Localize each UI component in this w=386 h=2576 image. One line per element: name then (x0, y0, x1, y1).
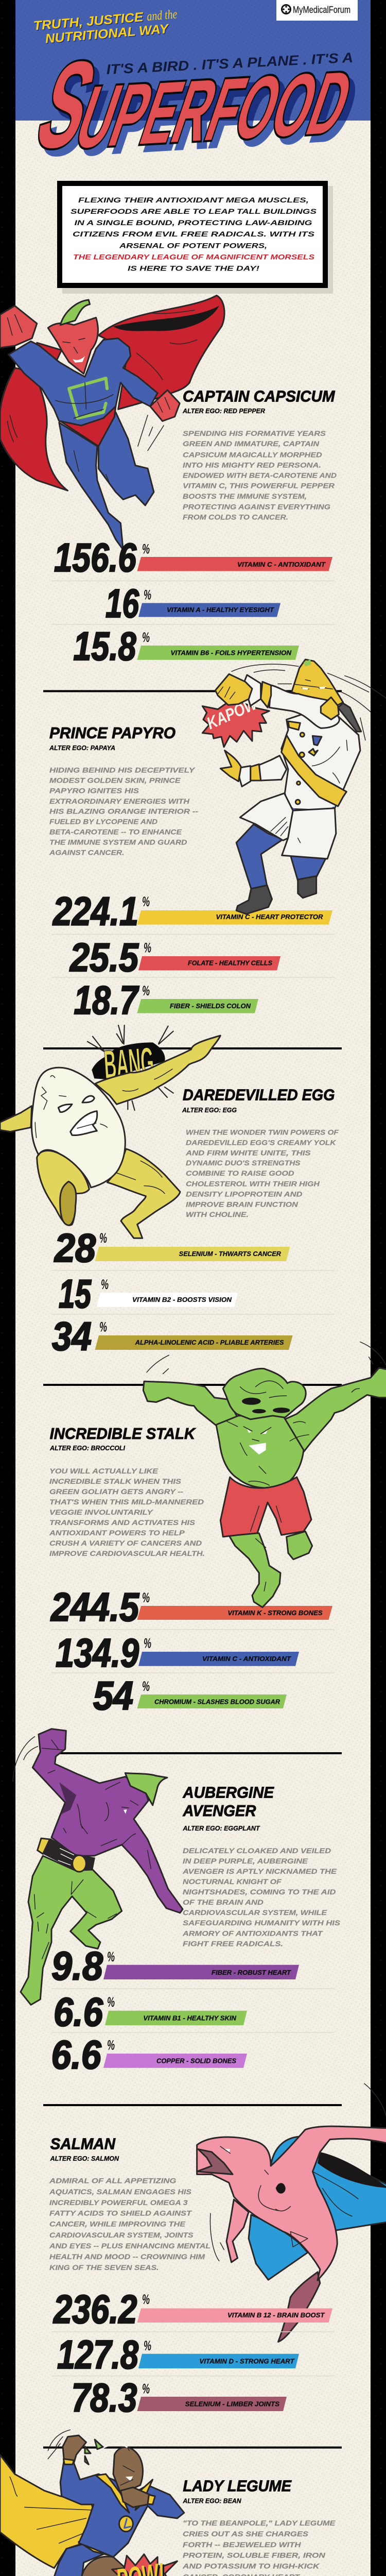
illustration: prince papyro (202, 659, 386, 914)
body text: KING OF THE SEVEN SEAS. (49, 2264, 159, 2272)
tagline: NUTRITIONAL WAY (45, 22, 170, 46)
stat: chromium: 54 (93, 1673, 133, 1718)
title: superfood: S (23, 35, 111, 174)
body text: PAPYRO IGNITES HIS (49, 787, 139, 795)
heading: captain capsicum: CAPTAIN CAPSICUM (183, 387, 336, 405)
stat: copper (51, 2032, 247, 2077)
body text: CARDIOVASCULAR SYSTEM, JOINTS (49, 2231, 194, 2239)
panel: intro text box: IS HERE TO SAVE THE DAY! (128, 264, 259, 272)
stat: vitamin b6: % (142, 630, 150, 645)
stat: chromium: CHROMIUM - SLASHES BLOOD SUGAR (154, 1698, 280, 1705)
body text: TRANSFORMS AND ACTIVATES HIS (49, 1519, 195, 1527)
stat: vitamin b1: 6.6 (54, 1989, 103, 2035)
stat: folate: FOLATE - HEALTHY CELLS (188, 960, 273, 967)
stat: chromium: % (142, 1679, 150, 1694)
tagline: TRUTH, JUSTICE (33, 10, 145, 34)
stat: vitamin a: VITAMIN A - HEALTHY EYESIGHT (167, 606, 274, 614)
motion lines and kapow burst (202, 664, 386, 747)
section: daredevilled egg (0, 1025, 342, 1359)
stat: vitamin c: 156.6 (54, 535, 136, 580)
alter ego: ALTER EGO: PAPAYA (49, 744, 115, 752)
stat: folate: 25.5 (69, 935, 139, 980)
stat: vitamin b2 (59, 1271, 238, 1316)
stat: alpha-linolenic acid (52, 1313, 293, 1359)
stat: vitamin b1: VITAMIN B1 - HEALTHY SKIN (143, 2015, 237, 2022)
body text: "TO THE BEANPOLE," LADY LEGUME (183, 2519, 336, 2527)
stat: vitamin c: % (142, 541, 150, 556)
stat: chromium (93, 1673, 287, 1718)
illustration: daredevilled egg (0, 1025, 220, 1238)
body text: HIS BLAZING ORANGE INTERIOR -- (49, 808, 199, 815)
body text: NIGHTSHADES, COMING TO THE AID (183, 1888, 336, 1896)
body text (49, 767, 199, 856)
stat: vitamin b1: % (107, 1994, 115, 2010)
heading: incredible stalk: INCREDIBLE STALK (50, 1425, 196, 1443)
panel: intro text box: IN A SINGLE BOUND, PROTECTING LAW-ABIDING (74, 218, 312, 227)
stat: vitamin d: % (144, 2338, 151, 2353)
body text: GREEN GOLIATH GETS ANGRY -- (49, 1488, 184, 1496)
alter ego: ALTER EGO: BEAN (182, 2498, 242, 2505)
stat: copper: COPPER - SOLID BONES (156, 2058, 237, 2065)
body text: IN DEEP PURPLE, AUBERGINE (183, 1857, 308, 1865)
body text: IMPROVE BRAIN FUNCTION (186, 1200, 298, 1208)
header blue band (15, 0, 371, 121)
tagline: and the (146, 7, 178, 24)
stat: alpha-linolenic acid: ALPHA-LINOLENIC ACID - PLIABLE ARTERIES (135, 1339, 284, 1346)
body text: DENSITY LIPOPROTEIN AND (186, 1190, 303, 1198)
body text: PROTEIN, SOLUBLE FIBER, IRON (183, 2552, 325, 2560)
stat: vitamin k: 244.5 (50, 1584, 139, 1630)
body text: INTO HIS MIGHTY RED PERSONA. (183, 462, 321, 469)
stat: vitamin k: % (142, 1590, 150, 1605)
stat: vitamin b12: 236.2 (52, 2286, 137, 2332)
body text: WHEN THE WONDER TWIN POWERS OF (186, 1128, 339, 1137)
title: superfood (38, 59, 355, 157)
body text: THAT'S WHEN THIS MILD-MANNERED (49, 1498, 204, 1506)
body text: THE IMMUNE SYSTEM AND GUARD (49, 839, 187, 846)
tagline: NUTRITIONAL WAY (45, 22, 171, 47)
body text: FATTY ACIDS TO SHIELD AGAINST (49, 2209, 192, 2217)
section: prince papyro (43, 659, 386, 1023)
stat: fiber: % (107, 1949, 115, 1964)
section: captain capsicum (0, 295, 337, 669)
stat: fiber (74, 977, 258, 1023)
tagline (33, 7, 178, 47)
stat: selenium: % (99, 1230, 107, 1246)
stat: folate (69, 935, 280, 980)
stat: vitamin c: VITAMIN C - HEART PROTECTOR (216, 913, 323, 921)
panel: intro text box: CITIZENS FROM EVIL FREE RADICALS. WITH ITS (73, 230, 315, 238)
strapline: it's a bird, it's a plane: IT'S A BIRD . IT'S A PLANE . IT'S A (106, 50, 354, 77)
stat: fiber: FIBER - SHIELDS COLON (170, 1003, 251, 1010)
stat: vitamin b2: 15 (59, 1271, 92, 1316)
body text: GREEN AND IMMATURE, CAPTAIN (183, 440, 319, 448)
heading: salman: SALMAN (50, 2135, 116, 2153)
illustration: captain capsicum (0, 295, 224, 550)
stat: vitamin c: VITAMIN C - ANTIOXIDANT (202, 1655, 291, 1663)
stat: vitamin k: VITAMIN K - STRONG BONES (227, 1609, 323, 1617)
body text: HIDING BEHIND HIS DECEPTIVELY (49, 767, 196, 774)
stat: fiber: 18.7 (74, 977, 139, 1023)
heading: aubergine avenger: AVENGER (182, 1802, 256, 1820)
body text: DYNAMIC DUO'S STRENGTHS (186, 1159, 301, 1167)
illustration: salman (197, 2083, 386, 2342)
stat: vitamin b6: 15.8 (73, 623, 136, 669)
stat: copper: % (107, 2038, 115, 2053)
stat: vitamin c: 224.1 (52, 888, 138, 934)
body text: AGAINST CANCER. (49, 849, 125, 856)
stat: vitamin b12: VITAMIN B 12 - BRAIN BOOST (227, 2312, 325, 2319)
body text: FORTH -- BEJEWELED WITH (183, 2541, 301, 2549)
body text (182, 1847, 340, 1947)
body text: INCREDIBLE STALK WHEN THIS (49, 1478, 181, 1485)
body text: ANTIOXIDANT POWERS TO HELP (49, 1529, 185, 1537)
body text: BETA-CAROTENE -- TO ENHANCE (49, 828, 182, 836)
title: superfood: S (28, 41, 116, 180)
stat: selenium (54, 1225, 290, 1270)
heading: prince papyro: PRINCE PAPYRO (49, 724, 176, 742)
heading: aubergine avenger: AUBERGINE (182, 1784, 274, 1802)
illustration: incredible stalk (143, 1342, 386, 1607)
alter ego: ALTER EGO: EGGPLANT (182, 1825, 260, 1832)
body text: WITH CHOLINE. (186, 1211, 249, 1218)
alter ego: ALTER EGO: EGG (182, 1107, 237, 1114)
body text: DAREDEVILLED EGG'S CREAMY YOLK (186, 1139, 337, 1146)
panel: header (15, 0, 371, 157)
body text: MODEST GOLDEN SKIN, PRINCE (49, 777, 181, 785)
heading: aubergine avenger (182, 1784, 274, 1820)
stat: selenium: SELENIUM - LIMBER JOINTS (185, 2401, 280, 2408)
section: incredible stalk (43, 1342, 386, 1718)
section: lady legume (0, 2430, 342, 2576)
stat: vitamin b2: % (101, 1277, 109, 1292)
stat: copper: 6.6 (51, 2032, 101, 2077)
stat: vitamin d: 127.8 (57, 2332, 138, 2377)
panel: intro text box: FLEXING THEIR ANTIOXIDANT MEGA MUSCLES, (78, 196, 309, 204)
body text: COMBINE TO RAISE GOOD (186, 1170, 294, 1177)
body text (182, 2519, 336, 2576)
body text: OF THE BRAIN AND (183, 1899, 264, 1906)
alter ego: ALTER EGO: RED PEPPER (182, 408, 265, 415)
body text: AND FIRM WHITE UNITE, THIS (185, 1149, 311, 1157)
panel: intro text box: ARSENAL OF POTENT POWERS, (119, 241, 267, 249)
body text: AND EYES -- PLUS ENHANCING MENTAL (49, 2242, 210, 2250)
stat: selenium: 78.3 (72, 2375, 137, 2420)
body text: FUELED BY LYCOPENE AND (49, 818, 157, 826)
illustration: lady legume (0, 2430, 184, 2576)
section: salman (43, 2083, 386, 2420)
body text: FIGHT FREE RADICALS. (183, 1940, 283, 1947)
body text: ENDOWED WITH BETA-CAROTENE AND (183, 472, 337, 480)
body text: PROTECTING AGAINST EVERYTHING (183, 503, 331, 511)
figure lower (236, 793, 336, 914)
illustration: aubergine avenger (13, 1729, 183, 2005)
body text: CRUSH A VARIETY OF CANCERS AND (49, 1539, 202, 1547)
body text: VEGGIE INVOLUNTARILY (49, 1509, 154, 1516)
body text: YOU WILL ACTUALLY LIKE (49, 1467, 159, 1475)
stat: vitamin c (56, 1630, 299, 1675)
body text: ARMORY OF ANTIOXIDANTS THAT (182, 1930, 324, 1937)
stat: vitamin k (50, 1584, 332, 1630)
kapow lettering: KAPOW (204, 693, 261, 733)
body text: CHOLESTEROL WITH THEIR HIGH (186, 1180, 320, 1188)
stat: vitamin b12: % (142, 2292, 150, 2307)
stat: selenium: 28 (54, 1225, 96, 1270)
stat: selenium (72, 2375, 287, 2420)
stat: fiber: FIBER - ROBUST HEART (212, 1969, 291, 1976)
body text: CRIES OUT AS SHE CHARGES (183, 2530, 308, 2538)
stat: vitamin b6: VITAMIN B6 - FOILS HYPERTENSION (171, 649, 292, 656)
pow burst (107, 2554, 177, 2576)
logo: MyMedicalForum (293, 5, 350, 15)
section: aubergine avenger (13, 1729, 342, 2077)
figure upper (215, 659, 365, 814)
stat: vitamin c: VITAMIN C - ANTIOXIDANT (237, 561, 326, 568)
stat: alpha-linolenic acid: 34 (52, 1313, 92, 1359)
body text: AQUATICS, SALMAN ENGAGES HIS (49, 2188, 191, 2196)
body text: HEALTH AND MOOD -- CROWNING HIM (49, 2253, 205, 2261)
stat: vitamin b6 (73, 623, 299, 669)
panel: intro text box (57, 181, 333, 294)
heading: lady legume: LADY LEGUME (183, 2477, 292, 2495)
stat: vitamin d: VITAMIN D - STRONG HEART (199, 2358, 295, 2365)
stat: vitamin d (57, 2332, 299, 2377)
logo (276, 0, 358, 21)
illustration: daredevilled egg: BANG (102, 1039, 155, 1087)
stat: vitamin a: 16 (106, 581, 139, 626)
body text: BOOSTS THE IMMUNE SYSTEM, (183, 493, 307, 500)
stat: vitamin b2: VITAMIN B2 - BOOSTS VISION (132, 1296, 232, 1303)
body text: CAPSICUM MAGICALLY MORPHED (183, 451, 322, 459)
panel: intro text box: THE LEGENDARY LEAGUE OF MAGNIFICENT MORSELS (73, 252, 315, 261)
body text: IMPROVE CARDIOVASCULAR HEALTH. (49, 1550, 205, 1557)
body text: SPENDING HIS FORMATIVE YEARS (183, 430, 326, 437)
stat: fiber: 9.8 (51, 1943, 103, 1989)
stat: fiber: % (142, 983, 150, 998)
body text (183, 430, 337, 521)
stat: fiber (51, 1943, 299, 1989)
stat: vitamin c (54, 535, 332, 580)
body text: AND POTASSIUM TO HIGH-KICK (182, 2563, 320, 2570)
body text: CANCER, WHILE IMPROVING THE (49, 2221, 186, 2228)
stat: vitamin c: 134.9 (56, 1630, 139, 1675)
stat: vitamin c: % (142, 894, 150, 909)
body text: CARDIOVASCULAR SYSTEM, WHILE (183, 1909, 327, 1917)
body text: NOCTURNAL KNIGHT OF (183, 1878, 282, 1886)
body text: VITAMIN C, THIS POWERFUL PEPPER (183, 482, 335, 490)
body text: FROM COLDS TO CANCER. (183, 513, 288, 521)
stat: vitamin b1 (54, 1989, 247, 2035)
title: superfood: S (28, 41, 116, 180)
alter ego: ALTER EGO: SALMON (50, 2155, 119, 2162)
body text: EXTRAORDINARY ENERGIES WITH (49, 798, 189, 805)
stat: selenium: SELENIUM - THWARTS CANCER (179, 1250, 281, 1258)
body text: DELICATELY CLOAKED AND VEILED (183, 1847, 331, 1855)
stat: vitamin a: % (144, 587, 151, 603)
body text (49, 1467, 205, 1557)
stat: folate: % (144, 940, 151, 956)
stat: vitamin c: % (144, 1635, 151, 1651)
stat: vitamin b12 (52, 2286, 332, 2332)
body text: AVENGER IS APTLY NICKNAMED THE (182, 1868, 337, 1875)
stat: vitamin a (106, 581, 280, 626)
stat: selenium: % (142, 2381, 150, 2397)
stat: alpha-linolenic acid: % (99, 1319, 107, 1335)
alter ego: ALTER EGO: BROCCOLI (49, 1445, 126, 1452)
body text: INCREDIBLY POWERFUL OMEGA 3 (49, 2199, 188, 2207)
body text (185, 1128, 339, 1218)
tagline: TRUTH, JUSTICE (33, 10, 145, 33)
heading: daredevilled egg: DAREDEVILLED EGG (183, 1086, 335, 1104)
body text: ADMIRAL OF ALL APPETIZING (49, 2177, 177, 2185)
body text: SAFEGUARDING HUMANITY WITH HIS (183, 1919, 340, 1927)
pow lettering (114, 2556, 168, 2576)
body text (49, 2177, 210, 2272)
stat: vitamin c (52, 888, 332, 934)
panel: intro text box: SUPERFOODS ARE ABLE TO LEAP TALL BUILDINGS (71, 207, 317, 215)
